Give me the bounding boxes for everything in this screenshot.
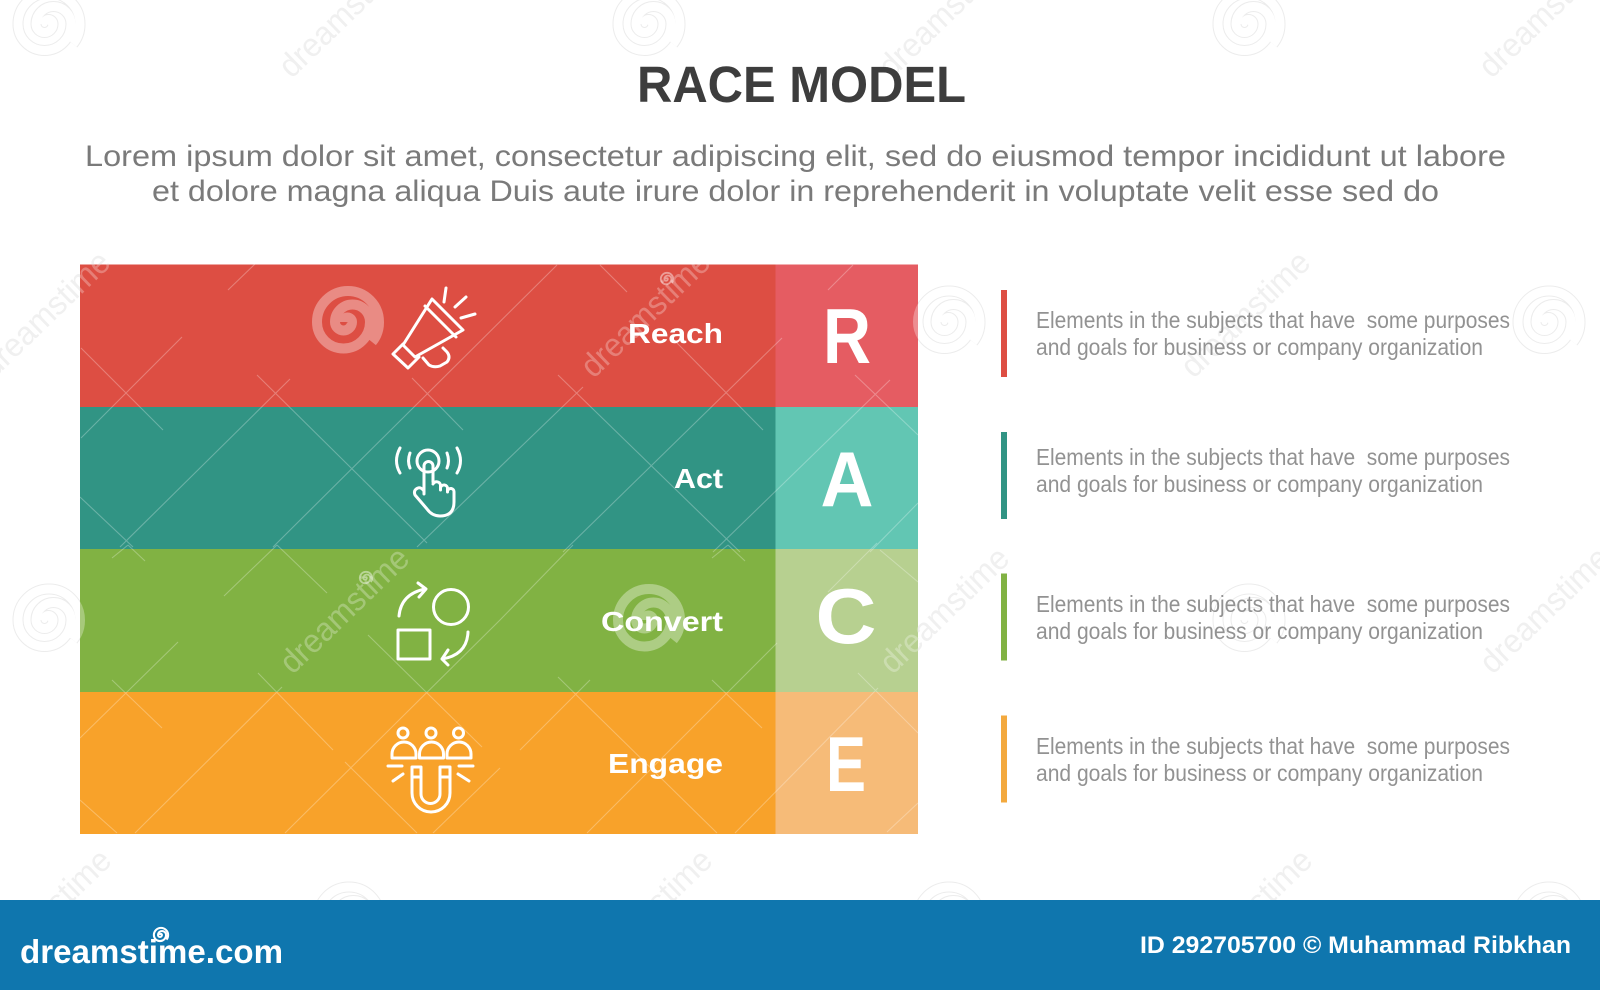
column letters R A C E: R — [823, 292, 871, 380]
row labels: Convert — [601, 606, 723, 637]
background watermark: dreamstime — [1175, 841, 1319, 982]
icon: people and magnet — [388, 728, 473, 812]
subtitle: Lorem ipsum dolor sit amet, consectetur adipiscing elit, sed do eiusmod tempor incididunt ut labore — [85, 140, 1506, 173]
row band: engage — [80, 692, 918, 834]
description: reach: and goals for business or company organization — [1036, 334, 1483, 360]
row band: reach — [80, 264, 918, 407]
description: engage — [1001, 716, 1510, 802]
description: reach — [1001, 290, 1510, 377]
footer logo: dreamstime.com — [20, 933, 283, 970]
description: convert — [1001, 574, 1510, 660]
column letters R A C E — [816, 292, 876, 808]
title: RACE MODEL — [637, 56, 966, 113]
row labels: Engage — [608, 748, 723, 779]
row band: convert — [80, 549, 918, 692]
description: act — [1001, 432, 1510, 519]
icon: convert cycle — [398, 583, 468, 665]
panel: RACE stacked rows — [80, 264, 918, 834]
icon: click hand — [396, 448, 460, 516]
column letters R A C E: E — [826, 720, 866, 808]
watermark over panel — [80, 264, 918, 834]
watermark over panel: dreamstime — [573, 243, 717, 384]
column letters R A C E: C — [816, 572, 876, 660]
background watermark: dreamstime — [1173, 243, 1317, 384]
watermark over panel: dreamstime — [272, 539, 416, 680]
watermark over panel: dreamstime — [872, 539, 1016, 680]
description: engage: Elements in the subjects that have some purposes — [1036, 733, 1510, 759]
subtitle: et dolore magna aliqua Duis aute irure dolor in reprehenderit in voluptate velit esse sed do — [152, 175, 1439, 208]
description: engage: and goals for business or company organization — [1036, 760, 1483, 786]
description: act: and goals for business or company organization — [1036, 471, 1483, 497]
icon: megaphone — [393, 288, 475, 368]
subtitle — [85, 140, 1506, 208]
row labels — [601, 318, 723, 779]
row labels: Reach — [628, 318, 723, 349]
description: reach: Elements in the subjects that have some purposes — [1036, 307, 1510, 333]
row labels: Act — [674, 463, 723, 494]
background watermark: dreamstime — [575, 841, 719, 982]
description: convert: Elements in the subjects that have some purposes — [1036, 591, 1510, 617]
footer credit: ID 292705700 © Muhammad Ribkhan — [1140, 932, 1571, 959]
row band: act — [80, 407, 918, 549]
description: convert: and goals for business or company organization — [1036, 618, 1483, 644]
description: act: Elements in the subjects that have some purposes — [1036, 444, 1510, 470]
footer bar — [0, 900, 1600, 990]
column letters R A C E: A — [820, 435, 874, 523]
background watermark: dreamstime — [872, 539, 1016, 680]
